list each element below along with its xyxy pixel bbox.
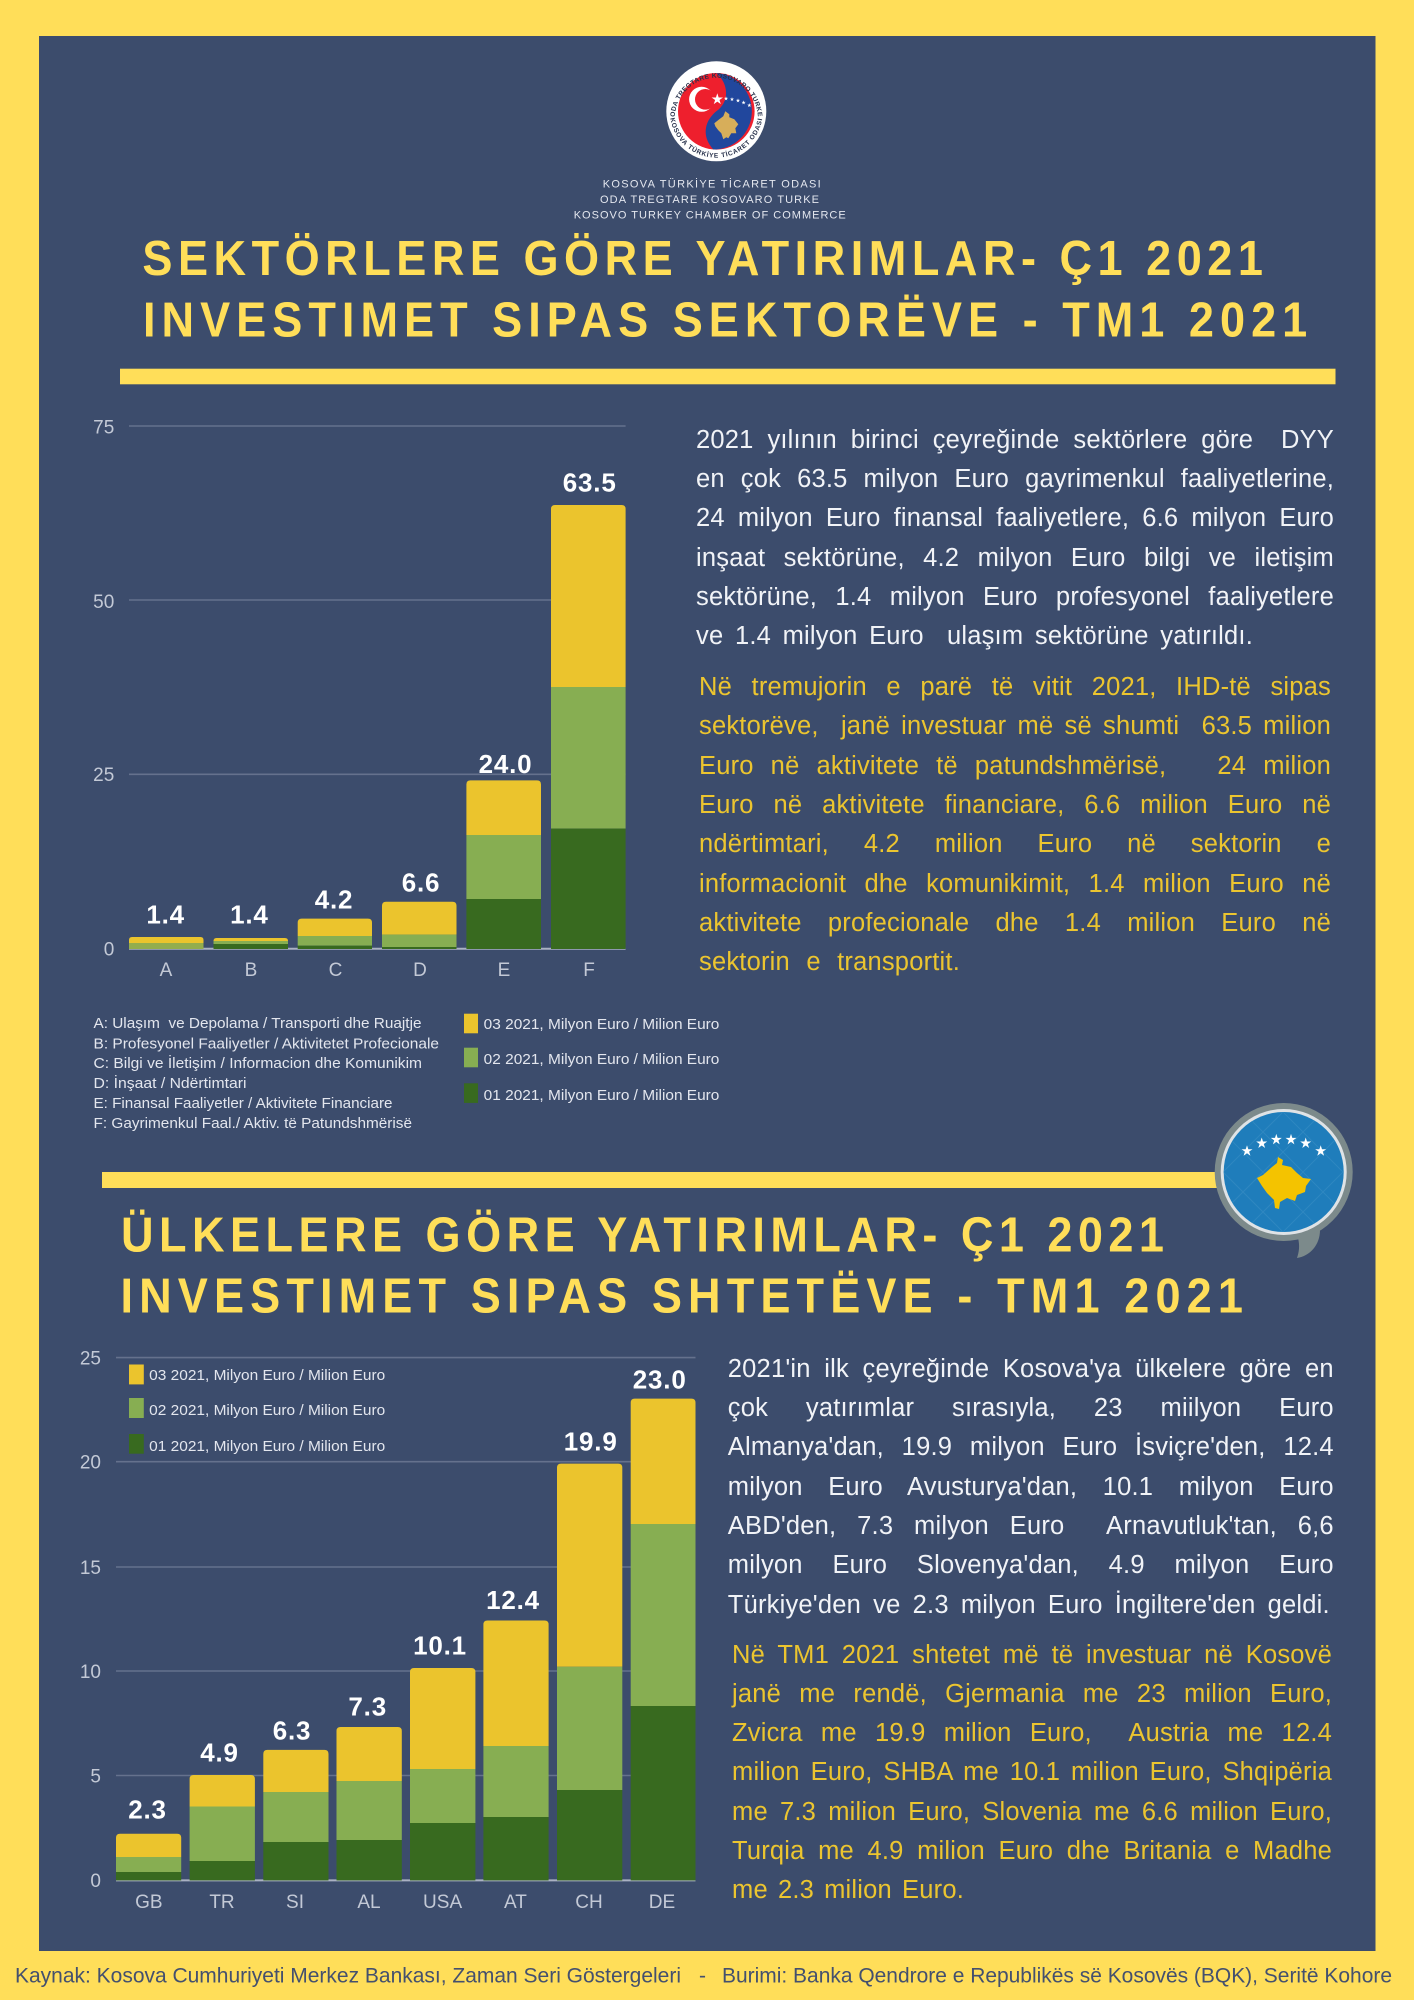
text block: sectors, Albanian: Në tremujorin e parë të vitit 2021, IHD-të sipas [699, 673, 1331, 701]
logo: chamber of commerce [666, 61, 766, 162]
bar AT [483, 1620, 549, 1880]
bar chart: countries: SI [286, 1892, 304, 1913]
title: sectors: SEKTÖRLERE GÖRE YATIRIMLAR- Ç1 2021 [142, 230, 1263, 285]
bar chart: countries: DE [649, 1892, 675, 1913]
logo: chamber of commerce: ODA TREGTARE KOSOVARO TURKE [670, 73, 762, 116]
text block: sectors, Albanian: informacionit dhe komunikimit, 1.4 milion Euro në [699, 870, 1331, 898]
title: sectors [142, 230, 1307, 347]
source footer: Burimi: Banka Qendrore e Republikës së Kosovës (BQK), Seritë Kohore [722, 1965, 1392, 1988]
bar chart: countries: TR [209, 1892, 235, 1913]
legend: quarters, country chart: 02 2021, Milyon Euro / Milion Euro [149, 1403, 385, 1419]
text block: sectors, Turkish: en çok 63.5 milyon Euro gayrimenkul faaliyetlerine, [696, 465, 1334, 493]
bar chart: countries: USA [423, 1892, 462, 1913]
title: countries: INVESTIMET SIPAS SHTETËVE - TM1 2021 [120, 1268, 1243, 1323]
bar chart: sectors: B [245, 960, 257, 981]
value labels: 6.6 [402, 868, 440, 898]
text block: sectors, Albanian: aktivitete profecionale dhe 1.4 milion Euro në [699, 909, 1331, 937]
value labels: 63.5 [563, 468, 617, 498]
divider bar 2 [102, 1172, 1220, 1188]
bar chart: sectors [93, 418, 626, 981]
bar B [214, 938, 288, 949]
bar chart: sectors: 75 [93, 418, 114, 439]
text block: countries, Turkish: 2021'in ilk çeyreğinde Kosova'ya ülkelere göre en [728, 1355, 1334, 1383]
text block: sectors, Albanian: Euro në aktivitete të patundshmërisë, 24 milion [699, 752, 1331, 780]
text block: countries, Albanian: janë me rendë, Gjermania me 23 milion Euro, [732, 1680, 1332, 1708]
value labels: 1.4 [230, 900, 269, 930]
bar chart: countries: GB [135, 1892, 163, 1913]
bar chart: countries: 15 [80, 1558, 101, 1579]
bar chart: countries: AL [357, 1892, 381, 1913]
source footer: - [699, 1965, 706, 1988]
bar E [466, 780, 541, 949]
source footer [15, 1965, 1392, 1988]
source footer: Kaynak: Kosova Cumhuriyeti Merkez Bankası, Zaman Seri Göstergeleri [15, 1965, 681, 1988]
legend: quarters, country chart: 01 2021, Milyon Euro / Milion Euro [149, 1439, 385, 1455]
text block: countries, Turkish: çok yatırımlar sırasıyla, 23 miilyon Euro [728, 1394, 1334, 1422]
text block: sectors, Albanian: Euro në aktivitete financiare, 6.6 milion Euro në [699, 791, 1331, 819]
logo caption [574, 178, 846, 222]
legend: quarters, sector chart: 01 2021, Milyon Euro / Milion Euro [484, 1088, 719, 1104]
legend: quarters, country chart: 03 2021, Milyon Euro / Milion Euro [149, 1368, 385, 1384]
logo caption: KOSOVA TÜRKİYE TİCARET ODASI [603, 178, 821, 191]
bar A [129, 937, 204, 949]
text block: countries, Turkish: ABD'den, 7.3 milyon Euro Arnavutluk'tan, 6,6 [728, 1512, 1334, 1540]
title: sectors: INVESTIMET SIPAS SEKTORËVE - TM1 2021 [143, 292, 1307, 347]
text block: countries, Albanian [731, 1640, 1332, 1904]
text block: sectors, Albanian [699, 673, 1331, 976]
value labels: 23.0 [633, 1364, 687, 1394]
bar chart: sectors: C [329, 960, 342, 981]
bar chart: countries: 10 [80, 1662, 101, 1683]
text block: countries, Albanian: me 7.3 milion Euro, Slovenia me 6.6 milion Euro, [732, 1798, 1332, 1826]
legend: sector codes: E: Finansal Faaliyetler / Aktivitete Financiare [94, 1096, 392, 1112]
legend: quarters, sector chart: 02 2021, Milyon Euro / Milion Euro [484, 1052, 719, 1068]
text block: countries, Albanian: me 2.3 milion Euro. [732, 1876, 964, 1904]
title: countries [120, 1207, 1243, 1323]
text block: sectors, Turkish: ve 1.4 milyon Euro ulaşım sektörüne yatırıldı. [696, 622, 1253, 650]
text block: sectors, Turkish [696, 426, 1334, 650]
bar chart: sectors: 0 [104, 940, 114, 961]
divider bar 1 [120, 369, 1336, 384]
bar chart: sectors: D [413, 960, 427, 981]
text block: countries, Turkish: Almanya'dan, 19.9 milyon Euro İsviçre'den, 12.4 [728, 1433, 1334, 1461]
value labels: 1.4 [146, 900, 185, 930]
bar chart: countries: 5 [90, 1766, 101, 1787]
bar chart: countries: AT [504, 1892, 527, 1913]
value labels: 4.9 [200, 1738, 239, 1768]
logo caption: ODA TREGTARE KOSOVARO TURKE [600, 194, 819, 206]
legend: sector codes [94, 1016, 439, 1132]
text block: countries, Albanian: milion Euro, SHBA me 10.1 milion Euro, Shqipëria [732, 1758, 1332, 1786]
value labels: 24.0 [479, 749, 532, 779]
text block: sectors, Albanian: ndërtimtari, 4.2 milion Euro në sektorin e [699, 830, 1331, 858]
text block: countries, Albanian: Turqia me 4.9 milion Euro dhe Britania e Madhe [732, 1837, 1332, 1865]
legend: quarters, sector chart [464, 1014, 719, 1104]
bar chart: sectors: A [160, 960, 173, 981]
bar USA [410, 1668, 475, 1880]
text block: countries, Turkish [728, 1355, 1334, 1619]
value labels: 19.9 [564, 1426, 618, 1456]
text block: sectors, Albanian: sektorëve, janë investuar më së shumti 63.5 milion [699, 712, 1331, 740]
value labels: 2.3 [128, 1794, 167, 1824]
bar chart: countries [80, 1348, 696, 1913]
text block: sectors, Turkish: 24 milyon Euro finansal faaliyetlere, 6.6 milyon Euro [696, 504, 1334, 532]
value labels: 6.3 [273, 1716, 311, 1746]
bar chart: sectors: E [498, 960, 510, 981]
legend: sector codes: D: İnşaat / Ndërtimtari [94, 1074, 246, 1092]
legend: sector codes: A: Ulaşım ve Depolama / Transporti dhe Ruajtje [94, 1016, 422, 1032]
text block: sectors, Turkish: 2021 yılının birinci çeyreğinde sektörlere göre DYY [696, 426, 1334, 454]
text block: sectors, Turkish: sektörüne, 1.4 milyon Euro profesyonel faaliyetlere [696, 583, 1334, 611]
legend: quarters, sector chart: 03 2021, Milyon Euro / Milion Euro [484, 1017, 719, 1033]
text block: sectors, Albanian: sektorin e transportit. [699, 948, 960, 976]
bar D [382, 902, 456, 949]
bar CH [557, 1464, 622, 1880]
bar GB [116, 1834, 181, 1880]
bar chart: sectors: 25 [93, 765, 114, 786]
value labels: 10.1 [413, 1630, 467, 1660]
text block: sectors, Turkish: inşaat sektörüne, 4.2 milyon Euro bilgi ve iletişim [696, 544, 1334, 572]
bar chart: sectors: 50 [93, 592, 114, 613]
title: countries: ÜLKELERE GÖRE YATIRIMLAR- Ç1 2021 [121, 1207, 1164, 1262]
legend: quarters, country chart [129, 1364, 385, 1455]
bar chart: countries: 25 [80, 1348, 101, 1370]
legend: sector codes: F: Gayrimenkul Faal./ Aktiv. të Patundshmërisë [94, 1116, 412, 1132]
text block: countries, Albanian: Zvicra me 19.9 milion Euro, Austria me 12.4 [732, 1719, 1332, 1747]
text block: countries, Turkish: Türkiye'den ve 2.3 milyon Euro İngiltere'den geldi. [728, 1591, 1330, 1619]
bar chart: countries: CH [575, 1892, 603, 1913]
text block: countries, Turkish: milyon Euro Slovenya'dan, 4.9 milyon Euro [728, 1551, 1334, 1579]
bar C [298, 919, 372, 949]
bar TR [190, 1775, 255, 1880]
text block: countries, Turkish: milyon Euro Avusturya'dan, 10.1 milyon Euro [728, 1473, 1334, 1501]
legend: sector codes: B: Profesyonel Faaliyetler / Aktivitetet Profecionale [94, 1036, 439, 1052]
text block: countries, Albanian: Në TM1 2021 shtetet më të investuar në Kosovë [732, 1640, 1332, 1668]
icon: Kosovo flag speech bubble [1215, 1103, 1353, 1258]
logo: chamber of commerce: KOSOVA TÜRKİYE TİCARET ODASI [670, 118, 762, 158]
value labels [146, 468, 617, 930]
bar F [551, 505, 626, 949]
legend: sector codes: C: Bilgi ve İletişim / Informacion dhe Komunikim [94, 1054, 422, 1072]
bar chart: sectors: F [583, 960, 595, 981]
value labels: 12.4 [486, 1585, 540, 1615]
bar SI [263, 1750, 328, 1880]
value labels: 4.2 [315, 884, 353, 914]
bar DE [631, 1399, 696, 1880]
logo caption: KOSOVO TURKEY CHAMBER OF COMMERCE [574, 210, 846, 222]
value labels [128, 1364, 687, 1824]
bar AL [336, 1727, 402, 1880]
bar chart: countries: 20 [80, 1452, 101, 1474]
value labels: 7.3 [348, 1692, 387, 1722]
bar chart: countries: 0 [90, 1871, 101, 1892]
